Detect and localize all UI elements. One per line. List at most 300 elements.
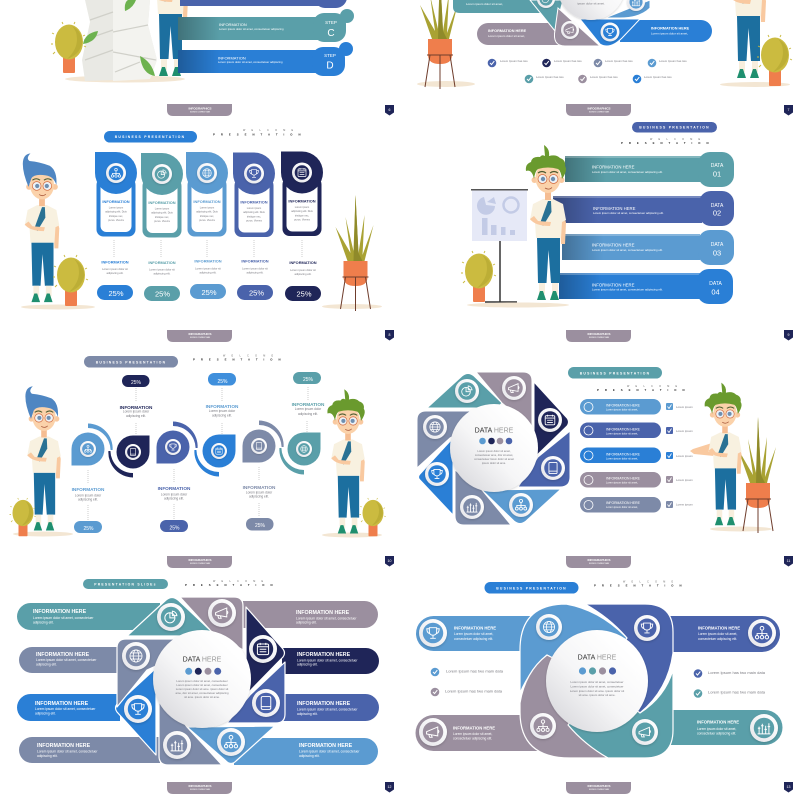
bar: indigo top right: consectetuer adipiscing elit. [698,637,737,641]
segment: light blue [520,604,627,693]
label below droplet 3: adipiscing elit. [164,496,184,500]
bar: light blue top left [416,616,535,651]
icon: potted plant [417,0,475,89]
icon: megaphone ring [208,599,236,627]
cycle segment: blue [580,19,640,46]
label above droplet 6: INFORMATION [292,402,325,407]
bar: teal info: Lorem ipsum dolor sit amet, [466,2,503,6]
list row 2: Lorem ipsum dolor sit amet, [606,432,638,436]
icon: org ring [509,493,533,517]
bar: indigo right: INFORMATION HERE [297,701,351,707]
stat column 5: 25% [296,290,312,298]
icon: tablet ring [541,456,565,480]
icon: cactus [461,251,569,308]
stat column 2: INFORMATION [148,260,176,265]
list row 3: Lorem ipsum dolor sit amet, [606,456,638,460]
segment: navy [534,382,568,458]
list row 1: Lorem ipsum [676,405,693,409]
card 5: INFORMATION [288,198,316,204]
card 1: tristique nec, [109,215,123,218]
segment: mauve [520,655,608,758]
bar: slate lower left [19,737,160,763]
checklist [488,59,687,83]
check item 7: Lorem Ipsum has two [644,75,672,79]
label below droplet 1: adipiscing elit. [78,498,98,502]
badge: step D: D [326,60,334,72]
bar: teal left: INFORMATION HERE [33,609,87,615]
icon: trophy ring [600,22,620,42]
check item 6: Lorem Ipsum has two [590,75,618,79]
check item 6 [578,75,618,83]
page number 10: 10 [388,559,391,563]
bar: blue info: INFORMATION HERE [651,26,690,30]
footer tab: BUSINESS COMPANY NAME [589,336,609,339]
stat column 5: adipiscing elit. [295,272,312,276]
bar: blue left [17,694,120,721]
slide 10: droplet timeline [10,354,394,568]
badge: step C [313,9,354,42]
centre circle with data text: Lorem ipsum dolor sit ame. ipsum dolor sit [176,687,228,691]
bar: mauve bottom left: Lorem ipsum dolor sit amet, [453,732,492,736]
swirl segments [520,604,673,758]
bar: light blue top left: INFORMATION HERE [454,626,496,630]
footer tab: INFOGRAPHICS [587,784,611,788]
list row 4: Lorem ipsum dolor sit amet, [606,480,638,484]
centre circle with data text: DATA HERE [475,428,514,434]
label below droplet 3: 25% [169,526,180,532]
centre circle with data text: DATA HERE [183,656,222,664]
heading pill [84,356,178,368]
bar: blue left: Lorem ipsum dolor sit amet, consectetuer [35,707,96,711]
icon: megaphone bar ring [419,718,447,746]
heading: welcome presentation: WELCOME [213,580,269,583]
card 3: tristique nec, [200,215,214,218]
footer tab: INFOGRAPHICS [587,558,611,562]
segment: indigo [585,604,673,713]
heading pill: PRESENTATION SLIDEs [94,582,157,586]
check item left 1: Lorem Ipsum has two main data [446,668,504,674]
list row 5: Lorem ipsum [676,502,693,506]
card 2 [141,153,183,238]
check item left 2: Lorem Ipsum has two main data [445,688,503,694]
bar: mauve right [243,601,378,628]
bar: mauve bottom left: INFORMATION HERE [453,726,495,730]
page number 8: 8 [389,333,391,337]
page number 6 [385,105,394,116]
icon: trophy bar ring [419,619,447,647]
heading pill [83,579,168,589]
stat column 2: adipiscing elit. [154,272,171,276]
heading pill: BUSINESS PRESENTATION [639,126,710,130]
icon: org bar ring [748,619,776,647]
centre circle with data text: ame, dior sit amet, consectetuer adipiscing [175,691,229,695]
footer tab [566,330,631,342]
bar: step C: INFORMATION [219,22,247,27]
heading pill: BUSINESS PRESENTATION [496,586,567,590]
badge: step D: STEP [324,53,336,58]
check item 3 [594,59,633,67]
footer tab: INFOGRAPHICS [188,106,212,110]
bar: blue info: Lorem ipsum dolor sit amet, [651,32,688,36]
heading pill [104,131,197,142]
segment: lower slate [455,470,511,525]
bar: light blue right [234,738,378,765]
heading: welcome presentation [185,580,278,587]
badge: step C: STEP [325,20,337,25]
centre circle with data text [450,404,538,492]
footer tab: BUSINESS COMPANY NAME [589,110,609,114]
heading pill [632,122,717,132]
footer tab: INFOGRAPHICS [587,106,611,110]
segment: light blue [187,726,275,764]
badge: step D [312,42,353,76]
bar 3: Lorem ipsum dolor sit amet, consectetuer adipiscing elit. [592,248,663,252]
icon: trophy ring [634,615,660,641]
list row 1 [580,399,693,414]
character: green hair [526,145,566,300]
badge data 04: 04 [711,288,720,296]
page number 12 [385,782,394,792]
wheel segments [116,597,285,765]
droplet 5 with arc [242,420,284,462]
icon: org ring [530,713,556,739]
icon: trophy ring [124,695,152,723]
icon: globe ring [122,642,150,670]
heading pill [568,367,662,378]
icon: bars ring [627,0,645,11]
page number 7 [784,105,793,116]
slide 9: data bars [461,122,793,342]
character legs [152,0,188,76]
footer tab [167,556,232,568]
footer tab: BUSINESS COMPANY NAME [190,110,210,114]
centre circle with data text: Lorem ipsum dolor sit amet, consectetuer [570,684,624,688]
icon: pie ring [157,603,185,631]
badge data 01 [698,152,734,187]
card 5: purus. Viverra [294,218,310,222]
icon: trophy ring [425,462,449,486]
bar: indigo top right: Lorem ipsum dolor sit amet, [698,632,737,636]
bar: mauve right: INFORMATION HERE [296,610,350,616]
card 4 [233,152,275,237]
bar 1: Lorem ipsum dolor sit amet, consectetuer adipiscing elit. [592,170,663,174]
footer tab: BUSINESS COMPANY NAME [190,788,210,791]
bar: step B [180,0,320,6]
stat column 2: Lorem ipsum dolor sit [149,268,175,272]
check item 4: Lorem Ipsum has two [659,59,687,63]
bar 4: INFORMATION HERE [592,282,635,288]
stat column 3: INFORMATION [194,258,222,264]
cycle segment: light blue [605,0,650,18]
bar: slate lower left: INFORMATION HERE [37,743,91,749]
heading pill: BUSINESS PRESENTATION [115,135,185,139]
stat column 1: adipiscing elit. [107,271,124,275]
bar: teal left [17,603,160,630]
list row 2: Lorem ipsum [676,429,693,433]
heading: welcome presentation [597,385,690,392]
heading: welcome presentation: PRESENTATION [213,132,306,136]
icon: cactus [53,255,88,306]
centre circle with data text: consectetuer lorem dolor sit amet [474,457,514,461]
stat column 2 [144,240,180,301]
droplet 3 with arc [156,422,198,464]
bar: navy right [282,648,379,674]
bar: teal bottom right: Lorem ipsum dolor sit amet, [697,727,736,731]
bar: blue info [620,20,712,42]
check item right 1 [694,669,766,678]
ground shadow [65,76,185,82]
heading: welcome presentation [621,138,714,145]
heading: welcome presentation: PRESENTATION [597,388,690,392]
bar: indigo top right: INFORMATION HERE [698,626,740,630]
presentation board chart [471,189,528,302]
centre circle: ipsum dolor sit amet. [577,2,605,6]
badge data 02: DATA [711,203,724,209]
icon: globe ring [423,415,447,439]
segment: indigo [518,431,570,487]
list row 3 [580,448,693,463]
centre circle with data text: Lorem ipsum dolor sit amet, consectetuer [570,680,624,684]
label above droplet 2: 25% [131,380,142,386]
bar: blue left: INFORMATION HERE [35,701,89,707]
list row 1: INFORMATION HERE [606,404,641,408]
card 4: INFORMATION [240,200,268,204]
page number 7: 7 [788,108,790,112]
badge data 01: 01 [713,170,721,178]
icon: pie ring [455,379,479,403]
centre circle with data text: sit ame. ipsum dolor sit ame. [579,693,616,697]
bar 4 [559,273,700,299]
bar 4: Lorem ipsum dolor sit amet, consectetuer adipiscing elit. [592,288,663,292]
centre circle with data text: DATA HERE [578,654,617,662]
octagon wheel [417,372,570,525]
bar: mauve bottom left [416,715,545,751]
label below droplet 3: INFORMATION [158,486,191,491]
bar: mauve right: Lorem ipsum dolor sit amet, consectetuer [296,616,357,620]
check item left 1 [431,668,504,676]
droplet 2 with arc [108,436,150,478]
check item 5 [525,75,564,83]
footer tab [566,782,631,794]
centre circle with data text: ipsum dolor sit ame. [482,461,506,465]
card 2: Lorem ipsum [155,208,169,210]
heading: welcome presentation: PRESENTATION [621,141,714,145]
check item right 1: Lorem Ipsum has two main data [708,670,766,675]
check item 2: Lorem Ipsum has two [554,59,582,63]
heading: welcome presentation: WELCOME [243,129,299,132]
heading: welcome presentation: PRESENTATION [594,584,688,588]
label above droplet 6: Lorem ipsum dolor [295,407,322,411]
bar: blue left: adipiscing elit. [35,712,56,716]
label above droplet 6 [292,372,325,432]
slide 11: octagon wheel with list [417,367,793,568]
bar 3: INFORMATION HERE [592,242,635,248]
segment: navy [246,607,284,695]
check item 4 [648,59,687,67]
list row 3: INFORMATION HERE [606,452,641,456]
card 1: Lorem ipsum [109,206,123,210]
footer tab [167,104,232,116]
label above droplet 4: 25% [217,379,228,385]
footer tab: INFOGRAPHICS [188,332,212,336]
centre circle with data text [546,630,648,732]
bar: step D: INFORMATION [218,56,246,60]
segment: teal [127,598,211,636]
list row 5 [580,497,693,512]
droplet 6 with arc [279,432,320,474]
stat column 1: Lorem ipsum dolor sit [102,267,128,271]
card 1 [95,152,137,236]
footer tab [167,330,232,342]
bar: indigo right [282,694,379,721]
icon: bars bar ring [750,714,778,742]
page number 11: 11 [787,559,790,563]
check item 1: Lorem Ipsum has two [500,59,528,63]
bar 3 [562,234,700,260]
slide 7: cycle with checklist [417,0,793,116]
centre circle with data text: consectetuer ame, dior sit amet, [475,453,513,457]
page number 9 [784,330,793,340]
heading: welcome presentation: WELCOME [223,354,279,358]
icon: pie ring [537,0,555,8]
character: green hair [322,389,382,538]
icon: bars ring [163,731,191,759]
bar: slate left: INFORMATION HERE [36,652,90,658]
heading: welcome presentation: PRESENTATION [185,583,278,587]
slide 12: wheel with eight bars [17,579,394,794]
card 3: Lorem ipsum [200,206,214,210]
footer tab: INFOGRAPHICS [587,332,611,336]
bar: navy right: Lorem ipsum dolor sit amet, consectetuer [297,658,358,662]
card 1: INFORMATION [102,199,130,204]
heading: welcome presentation [594,580,688,588]
label below droplet 5: 25% [255,523,266,529]
segment: upper slate [117,639,180,707]
stat column 4 [237,240,273,300]
bar: slate left: Lorem ipsum dolor sit amet, consectetuer [36,658,97,662]
footer tab [167,782,232,794]
label below droplet 5: Lorem ipsum dolor [246,490,273,494]
footer tab: BUSINESS COMPANY NAME [190,562,210,565]
card 2: tristique nec, [155,216,169,219]
centre circle [557,0,625,20]
badge data 03: 03 [713,248,721,258]
segment: light blue [482,489,561,524]
bar: light blue top left: Lorem ipsum dolor sit amet, [454,632,493,636]
slide 6: steps list [51,0,394,116]
icon: calendar ring [538,408,562,432]
check item 5: Lorem Ipsum has two [536,75,564,79]
segment: blue [116,668,156,755]
centre circle with data text: Lorem ipsum dolor sit amet, [477,449,511,453]
heading: welcome presentation: PRESENTATION [193,358,286,362]
icon: globe ring [536,614,562,640]
bar: light blue right: Lorem ipsum dolor sit amet, consectetuer [299,750,360,754]
character: green hair [720,0,790,87]
bar: step D: Lorem ipsum dolor sit amet, consectetuer adipiscing [218,60,283,64]
bar: mauve right: adipiscing elit. [296,620,317,624]
card 3 [186,152,228,236]
check item left 2 [431,688,503,696]
segment: lower slate [159,690,222,765]
page number 10 [385,556,394,566]
icon: money leaves [83,0,155,76]
bar: navy right: adipiscing elit. [297,662,318,666]
label below droplet 5: INFORMATION [243,485,276,490]
bar: teal left: adipiscing elit. [33,620,54,624]
badge: step C: C [327,28,335,39]
list row 4: Lorem ipsum [676,478,693,482]
card 3: adipiscing elit. Duis [196,210,218,214]
label below droplet 3: Lorem ipsum dolor [161,492,188,496]
stat column 3: Lorem ipsum dolor sit [195,266,221,270]
list row 4: INFORMATION HERE [606,476,641,480]
bar 1 [565,156,702,182]
label above droplet 6: adipiscing elit. [298,412,318,416]
character: blue hair [21,153,95,310]
card 2: INFORMATION [148,200,176,205]
check item right 2: Lorem Ipsum has two main data [708,690,766,694]
check item 1 [488,59,528,67]
bar 2 [553,196,702,223]
stat column 4: adipiscing elit. [247,270,264,274]
icon: org ring [217,728,245,756]
bar 2: Lorem ipsum dolor sit amet, consectetuer adipiscing elit. [593,211,664,215]
bar: mauve info: INFORMATION HERE [488,29,527,33]
card 3: purus. Viverra [199,219,215,222]
segment: mauve [180,597,243,650]
label above droplet 2: Lorem ipsum dolor [123,410,150,414]
bar: slate left: adipiscing elit. [36,662,57,666]
check item 3: Lorem Ipsum has two [605,59,633,63]
label below droplet 5 [243,467,276,530]
badge data 03 [698,230,734,265]
icon: tablet ring [252,689,280,717]
bar: step C [178,17,320,40]
card 5: Lorem ipsum [295,206,309,209]
card 2: adipiscing elit. Duis [151,212,173,214]
card 5 [281,152,323,236]
icon: megaphone ring [561,21,579,39]
stat column 3 [190,240,226,299]
page number 12: 12 [388,785,391,789]
card 1: purus. Viverra [108,219,124,222]
badge data 02 [699,191,734,226]
badge data 01: DATA [711,163,724,169]
bar: teal left: Lorem ipsum dolor sit amet, consectetuer [33,616,94,620]
list row 1: Lorem ipsum dolor sit amet, [606,408,638,412]
badge data 04: DATA [709,281,722,287]
stat column 3: adipiscing elit. [200,270,217,274]
bar: indigo right: adipiscing elit. [297,712,318,716]
badge: step B [314,0,347,8]
heading: welcome presentation: WELCOME [623,580,679,584]
icon: bars ring [460,495,484,519]
bar: mauve bottom left: consectetuer adipiscing elit. [453,736,492,740]
list row 2: INFORMATION HERE [606,428,641,432]
card 4: purus. Viverra [246,220,262,222]
centre circle with data text: Lorem ipsum dolor sit ame. ipsum dolor sit [570,689,624,693]
icon: calendar ring [249,635,277,663]
stat column 4: Lorem ipsum dolor sit [242,266,268,270]
stat column 1 [97,240,133,300]
character: blue hair [13,386,73,536]
icon: cactus [360,498,386,536]
bar: slate left [19,647,120,673]
icon: cactus [10,498,36,536]
page number 13: 13 [787,785,790,789]
list row 5: Lorem ipsum dolor sit amet, [606,505,638,509]
